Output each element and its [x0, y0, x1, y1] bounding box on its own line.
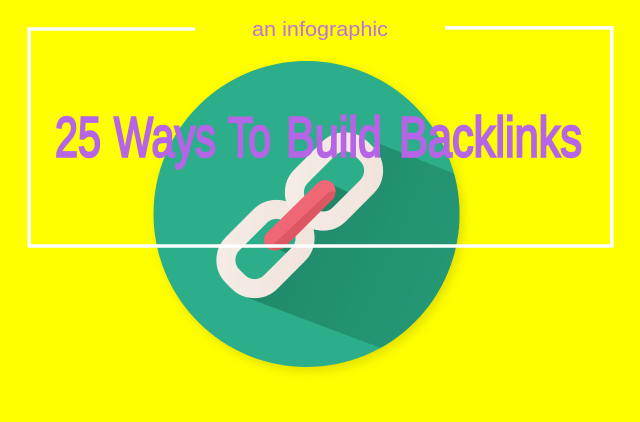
icon: chain link badge — [154, 61, 480, 371]
subtitle: an infographic — [252, 18, 388, 41]
badge drop shadow — [157, 65, 463, 371]
title: Build — [286, 105, 382, 169]
title: Ways — [114, 105, 216, 169]
upper chain link — [285, 132, 383, 231]
title: Backlinks — [399, 105, 582, 169]
white frame — [29, 28, 612, 246]
shadow inside upper link hole — [318, 185, 350, 211]
lower link hole — [216, 200, 315, 298]
long shadow of chain — [248, 144, 460, 348]
red connector bar — [269, 190, 336, 250]
title: To — [228, 105, 271, 169]
infographic canvas — [27, 21, 614, 374]
upper link hole — [285, 132, 383, 231]
title — [55, 105, 582, 169]
title: 25 — [55, 105, 101, 169]
badge green disc — [154, 61, 460, 367]
shadow below bar tip in lower link hole — [276, 244, 296, 256]
lower chain link — [216, 200, 315, 298]
